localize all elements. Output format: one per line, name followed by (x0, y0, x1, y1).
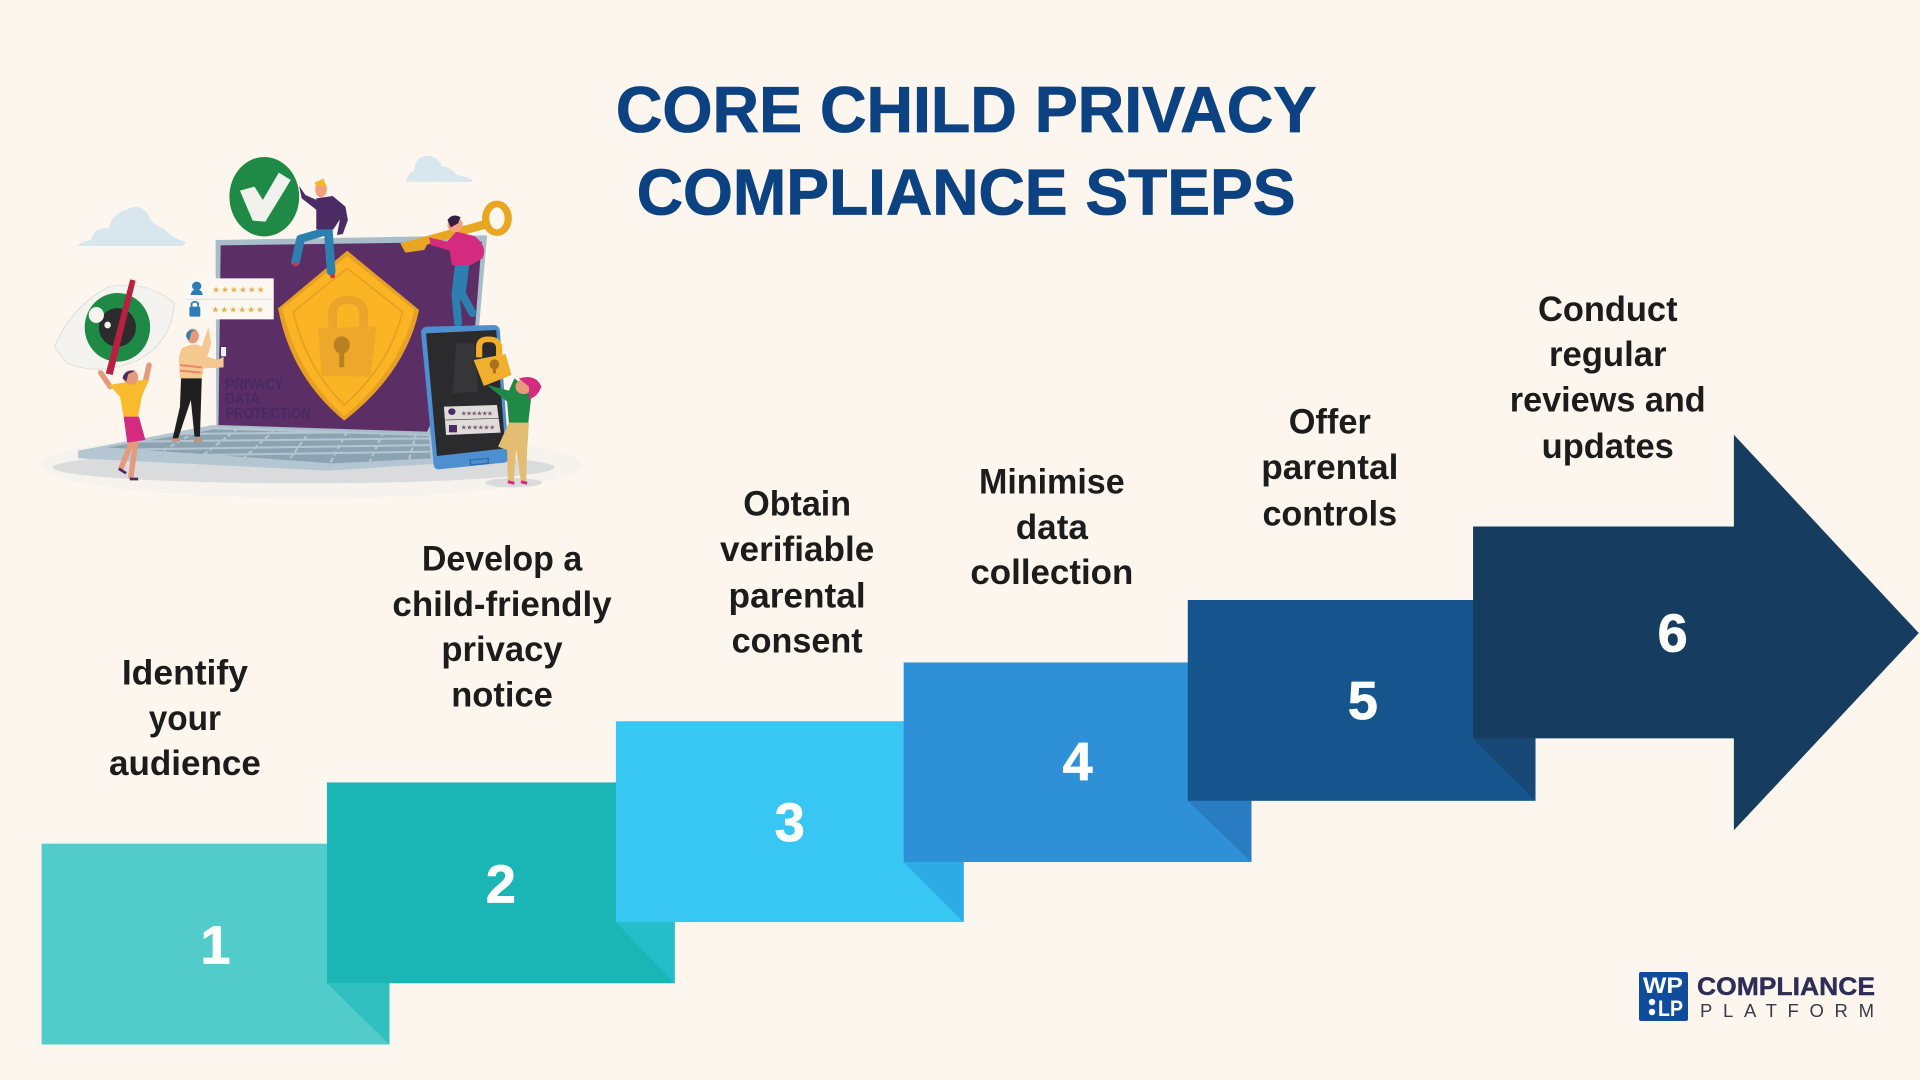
man in beige sweater (172, 327, 226, 442)
cloud: right (406, 156, 473, 182)
label: step 1: your (149, 699, 221, 738)
person with key (429, 216, 484, 323)
label: step 3: Obtain (743, 485, 851, 524)
logo badge: WP (1643, 973, 1683, 998)
logo wordmark: COMPLIANCE (1697, 973, 1875, 1001)
label: step 4 (970, 462, 1133, 592)
laptop keyboard base (78, 425, 442, 471)
logo wordmark (1697, 973, 1875, 1021)
label: step 1: audience (109, 744, 261, 783)
label: step 1: Identify (122, 653, 249, 692)
step 5 number: 5 (1348, 671, 1378, 731)
logo: WPLP Compliance Platform (1639, 972, 1875, 1021)
step 4 block (904, 662, 1251, 862)
step 3 block (616, 721, 964, 922)
phone: ★★★★★★ (461, 410, 493, 417)
cloud: left (78, 207, 185, 246)
step 1 number: 1 (201, 916, 230, 976)
label: step 3: parental (729, 576, 866, 615)
step 2 block (327, 782, 675, 983)
label: step 5: controls (1262, 494, 1397, 533)
label: step 1 (109, 653, 261, 783)
label: step 5: Offer (1289, 402, 1371, 441)
laptop screen (218, 242, 482, 432)
step 4 number: 4 (1063, 732, 1093, 792)
woman holding eye (101, 365, 149, 479)
phone: ★★★★★★ (461, 424, 495, 431)
label: step 3 (720, 485, 874, 661)
label: step 5: parental (1261, 448, 1398, 487)
phone padlock (474, 339, 511, 386)
label: step 2: child-friendly (392, 585, 612, 624)
step 1 block (42, 844, 389, 1044)
label: step 4: collection (970, 553, 1133, 592)
step 6 number: 6 (1658, 603, 1688, 663)
logo badge (1639, 972, 1688, 1021)
title: COMPLIANCE STEPS (637, 155, 1296, 228)
label: step 6: regular (1549, 335, 1667, 374)
logo wordmark: PLATFORM (1700, 1000, 1874, 1021)
login card: ★★★★★★ (212, 285, 265, 294)
label: step 3: verifiable (720, 530, 874, 569)
shield with padlock (278, 251, 419, 421)
phone (421, 325, 509, 469)
key (400, 204, 508, 253)
step 2 number: 2 (486, 854, 516, 914)
label: step 5 (1261, 402, 1398, 533)
screen text: PROTECTION (225, 405, 311, 422)
laptop screen frame (216, 235, 487, 435)
man on laptop (293, 179, 348, 278)
label: step 4: Minimise (979, 462, 1125, 501)
label: step 3: consent (732, 622, 863, 661)
label: step 4: data (1016, 508, 1089, 547)
check badge (229, 157, 299, 236)
title (616, 73, 1316, 228)
ground shadow (40, 432, 582, 498)
logo badge: LP (1658, 996, 1683, 1021)
label: step 6 (1510, 290, 1706, 466)
label: step 6: reviews and (1510, 380, 1706, 419)
screen text: PRIVACY (225, 376, 284, 393)
label: step 2: privacy (441, 630, 563, 669)
label: step 2: notice (451, 676, 553, 715)
label: step 2: Develop a (422, 540, 583, 579)
label: step 6: updates (1542, 427, 1674, 466)
login card: ★★★★★★ (211, 305, 264, 314)
title: CORE CHILD PRIVACY (616, 73, 1316, 146)
step 3 number: 3 (775, 793, 805, 853)
screen text: DATA (225, 391, 260, 408)
step 6 arrow (1473, 435, 1919, 830)
laptop (78, 235, 487, 471)
login card (185, 278, 274, 319)
screen text (225, 376, 311, 422)
eye with strike (55, 279, 174, 375)
label: step 2 (392, 540, 612, 715)
woman holding padlock (487, 377, 541, 483)
step 5 block (1188, 600, 1536, 801)
illustration: privacy data protection laptop scene (40, 156, 582, 498)
label: step 6: Conduct (1538, 290, 1678, 329)
